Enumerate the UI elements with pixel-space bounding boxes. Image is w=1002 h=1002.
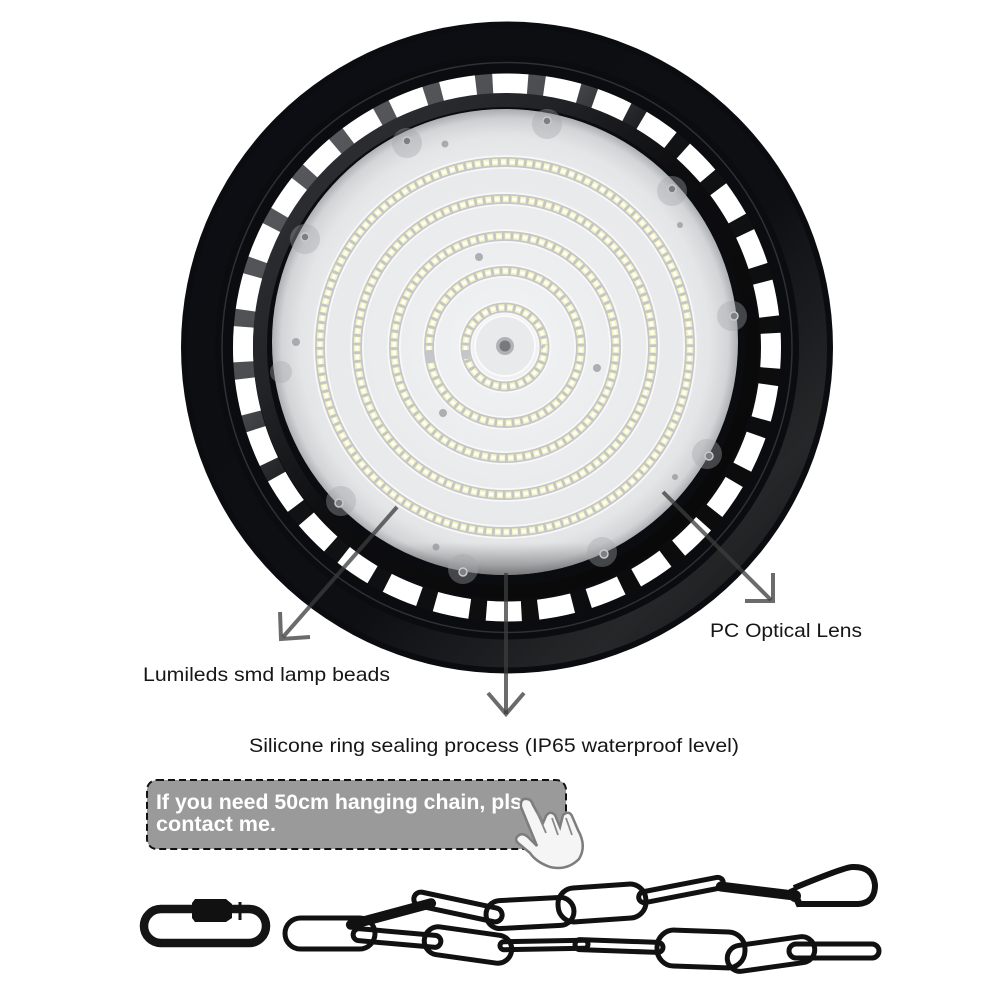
arrow: silicone ring sealing <box>488 573 524 714</box>
chain <box>285 867 879 973</box>
spoke ring <box>243 84 771 612</box>
lens mounting tabs <box>270 109 747 584</box>
LED ring 5 <box>320 162 690 532</box>
ventilation windows <box>243 84 771 612</box>
callout text: If you need 50cm hanging chain, pls <box>156 791 522 814</box>
housing highlight <box>201 42 813 654</box>
lens shading <box>272 109 738 575</box>
label: Silicone ring sealing process: Silicone ring sealing process (IP65 waterproof level) <box>249 735 739 757</box>
LED ring 2 <box>429 271 581 423</box>
lens screws <box>301 117 738 576</box>
arrow: Lumileds smd lamp beads <box>280 507 397 639</box>
icon: pointing hand <box>516 799 583 868</box>
callout text <box>156 791 522 836</box>
callout: hanging chain notice <box>147 780 566 849</box>
lamp: UFO high bay light <box>181 22 833 674</box>
arrow: PC optical lens <box>663 492 773 601</box>
icon: quick link connector <box>144 899 266 943</box>
label: Lumileds smd lamp beads: Lumileds smd lamp beads <box>143 664 390 686</box>
LED ring 4 <box>357 199 653 495</box>
lens disc <box>272 109 738 575</box>
callout box <box>147 780 566 849</box>
inner metal band <box>260 100 752 592</box>
LED ring 1 <box>466 308 544 386</box>
outer black housing ring <box>181 22 833 674</box>
LED ring 3 <box>394 236 616 458</box>
lens moulding dots <box>292 140 683 550</box>
callout text: contact me. <box>156 813 276 836</box>
label: PC Optical Lens: PC Optical Lens <box>710 620 862 642</box>
centre hub <box>475 316 535 376</box>
housing groove <box>222 62 792 632</box>
